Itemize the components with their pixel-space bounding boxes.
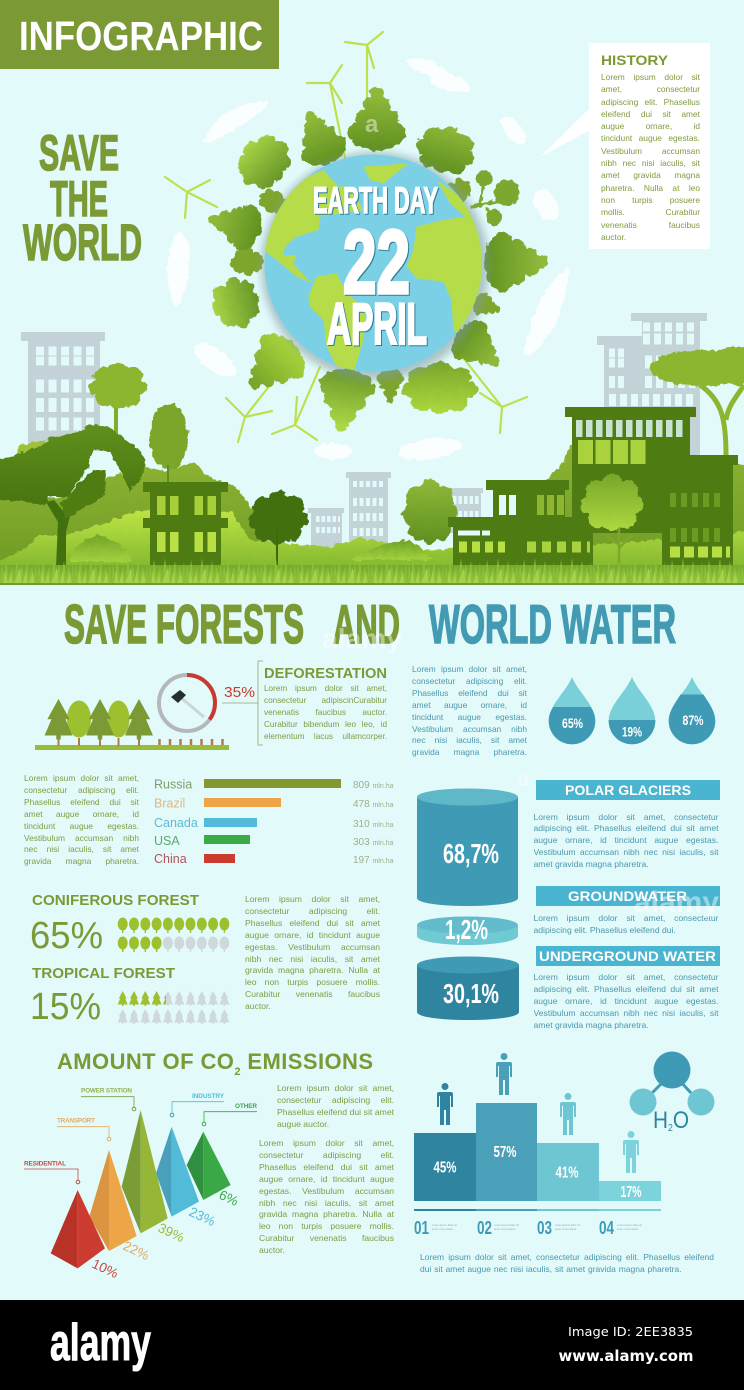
pictogram: coniferous trees <box>118 918 229 952</box>
CO2 text 2: leo non turpis posuere mollis. <box>259 1221 394 1231</box>
globe text: Earth Day 22 April: APRIL <box>327 292 427 357</box>
watermark: alamy <box>634 886 719 919</box>
heading: Deforestation: DEFORESTATION <box>264 666 387 682</box>
polar glaciers text: Lorem ipsum dolor sit amet, consectetur <box>534 812 718 822</box>
history text <box>601 71 700 245</box>
groundwater text: Lorem ipsum dolor sit amet, consectetur <box>534 913 718 923</box>
chart: population step bars <box>414 1053 661 1238</box>
section heading: Save Forests and World Water <box>64 593 676 655</box>
bar 57% <box>476 1103 537 1201</box>
water text: amet augue ornare, id <box>412 700 527 710</box>
bar: USA: 303 mln.ha <box>353 837 394 848</box>
right dark buildings <box>448 407 738 567</box>
polar glaciers text: amet gravida magna pharetra. <box>534 859 649 869</box>
cylinder: 1,2%: 1,2% <box>445 914 488 945</box>
cylinder: 30,1%: 30,1% <box>443 978 499 1009</box>
forest text: tincidunt augue egestas. <box>24 821 139 831</box>
panel: coniferous forest stat <box>32 895 230 952</box>
label: industry <box>170 1093 225 1117</box>
polar glaciers text: Vestibulum accumsan nibh nec nisi iaculis, sit <box>534 847 718 857</box>
bar 45%: 45% <box>434 1160 456 1176</box>
CO2 text 1: Phasellus eleifend dui sit amet <box>277 1107 394 1117</box>
deforestation text: Lorem ipsum dolor sit amet, <box>264 684 387 693</box>
step legend: 04 <box>599 1218 614 1238</box>
step legend: amet, cons ectetur <box>432 1227 453 1231</box>
step legend: 03 <box>537 1218 552 1238</box>
title banner: Infographic <box>0 0 279 69</box>
website: www.alamy.com <box>558 1347 694 1365</box>
dark trees <box>0 425 308 567</box>
underground water text: Vestibulum accumsan nibh nec nisi iaculis, sit <box>534 1008 718 1018</box>
banner: groundwater: GROUNDWATER <box>568 889 687 904</box>
step legend: amet, cons ectetur <box>555 1227 576 1231</box>
step legend: Lorem ipsum dolor sit <box>494 1223 519 1227</box>
history text: tincidunt augue egestas. <box>601 133 700 143</box>
watermark: a <box>365 111 379 138</box>
icon: H2O molecule: H <box>653 1107 670 1134</box>
callout: 35% <box>222 661 263 745</box>
logo: alamy: alamy <box>50 1314 151 1372</box>
bar: China <box>154 852 394 866</box>
percent labels: 10% <box>90 1256 121 1281</box>
step legend: 01 <box>414 1218 429 1238</box>
panel: coniferous forest stat: CONIFEROUS FOREST <box>32 892 199 909</box>
globe text: Earth Day 22 April <box>313 180 438 357</box>
percent labels: 22% <box>121 1238 152 1263</box>
bar: Russia: 809 mln.ha <box>353 780 394 791</box>
watermark: a <box>518 769 530 791</box>
icon: H2O molecule: 2 <box>668 1123 673 1134</box>
deforestation text: elementum lacus ullamcorper. <box>264 732 387 741</box>
forest types text: augue ornare, id tincidunt augue <box>245 930 380 940</box>
gauge with axe <box>159 675 215 731</box>
bar chart: deforestation by country <box>154 778 394 866</box>
globe shadow <box>261 152 489 380</box>
water text: tincidunt augue egestas. <box>412 712 527 722</box>
percent labels: 23% <box>187 1204 218 1229</box>
watermark <box>322 111 719 919</box>
banner: polar glaciers <box>536 780 720 800</box>
polar glaciers text <box>534 812 718 874</box>
history text: augue ornare, id <box>601 121 700 131</box>
axis line <box>414 1209 661 1211</box>
cylinder: 30,1% <box>417 956 519 1020</box>
heading: Save the World <box>23 125 142 271</box>
label: other <box>202 1103 257 1126</box>
CO2 text 2: augue ornare, id tincidunt augue <box>259 1174 394 1184</box>
CO2 text 2 <box>259 1138 394 1260</box>
bar: Canada <box>154 816 394 830</box>
chart: CO2 pyramids <box>24 1088 257 1281</box>
percent labels: 6% <box>217 1187 241 1209</box>
CO2 text 2: auctor. <box>259 1245 285 1255</box>
underground water text <box>534 972 718 1034</box>
bottom water text <box>420 1252 714 1278</box>
step legend: Lorem ipsum dolor sit <box>432 1223 457 1227</box>
CO2 text 1 <box>277 1083 394 1133</box>
globe trees <box>203 87 549 436</box>
label: power station: POWER STATION <box>81 1088 132 1094</box>
water drop: 19%: 19% <box>622 724 642 740</box>
forest text: Phasellus eleifend dui sit <box>24 797 139 807</box>
underground water text: adipiscing elit. Phasellus eleifend dui sit amet <box>534 984 718 994</box>
grass <box>0 558 744 585</box>
forest text: consectetur adipiscing elit. <box>24 785 139 795</box>
CO2 text 2: gravida magna pharetra. Nulla at <box>259 1209 394 1219</box>
heading: Save the World: WORLD <box>23 214 142 271</box>
icon: H2O molecule: O <box>673 1107 689 1134</box>
bar: Russia <box>154 778 394 792</box>
CO2 text 2: consectetur adipiscing elit. <box>259 1150 394 1160</box>
label: industry: INDUSTRY <box>192 1093 225 1100</box>
groundwater text: adipiscing elit. Phasellus eleifend dui. <box>534 925 676 935</box>
step legend: amet, cons ectetur <box>617 1227 638 1231</box>
bar 17%: 17% <box>620 1184 642 1201</box>
water drop: 87%: 87% <box>682 712 704 728</box>
cylinder: 68,7% <box>417 788 518 906</box>
bar 57%: 57% <box>494 1144 516 1161</box>
cylinder: 1,2% <box>417 914 518 945</box>
watermark: alamy <box>322 623 402 654</box>
bottom water text: Lorem ipsum dolor sit amet, consectetur adipiscing elit. Phasellus eleifend <box>420 1252 714 1262</box>
history text: Lorem ipsum dolor sit <box>601 72 700 82</box>
forest types text: auctor. <box>245 1001 271 1011</box>
banner: groundwater <box>536 886 720 906</box>
CO2 text 1: consectetur adipiscing elit. <box>277 1095 394 1105</box>
bar: China: China <box>154 852 187 866</box>
forest text <box>24 773 139 871</box>
water text: Vestibulum accumsan nibh <box>412 724 527 734</box>
history text: mollis. Curabitur <box>601 207 700 217</box>
bushes <box>70 535 434 562</box>
history text: venenatis faucibus <box>601 220 700 230</box>
background trees and hills <box>0 347 744 572</box>
water text: consectetur adipiscing elit. <box>412 676 527 686</box>
forest text: amet augue ornare, id <box>24 809 139 819</box>
tree stumps <box>160 739 222 745</box>
person icons <box>437 1053 639 1173</box>
bar: Russia: Russia <box>154 778 192 792</box>
CO2 text 2: Curabitur venenatis faucibus <box>259 1233 394 1243</box>
history text: adipiscing elit. Phasellus <box>601 97 700 107</box>
panel: tropical forest stat <box>32 968 230 1024</box>
image id: Image ID: 2EE3835 <box>568 1324 693 1339</box>
water text: gravida magna pharetra. <box>412 747 527 757</box>
banner: underground water <box>536 946 720 966</box>
heading: CO2 emissions: EMISSIONS <box>241 1049 373 1074</box>
wind turbines <box>165 32 527 442</box>
step legend: 02 <box>477 1218 492 1238</box>
label: other: OTHER <box>235 1103 257 1110</box>
label: transport: TRANSPORT <box>57 1118 95 1124</box>
CO2 text 2: Phasellus eleifend dui sit amet <box>259 1162 394 1172</box>
underground water text: Lorem ipsum dolor sit amet, consectetur <box>534 972 718 982</box>
CO2 text 1: Lorem ipsum dolor sit amet, <box>277 1083 394 1093</box>
history text: amet, consectetur <box>601 84 700 94</box>
forest types text: Lorem ipsum dolor sit amet, <box>245 894 380 904</box>
label: residential <box>24 1160 80 1184</box>
bar: Canada: 310 mln.ha <box>353 819 394 830</box>
water drop: 65%: 65% <box>562 715 583 731</box>
forest types text: leo non turpis posuere mollis. <box>245 977 380 987</box>
percent labels: 39% <box>156 1220 187 1245</box>
forest text: Lorem ipsum dolor sit amet, <box>24 773 139 783</box>
history text: Vestibulum accumsan <box>601 146 700 156</box>
icon: H2O molecule <box>630 1052 714 1134</box>
dark building windows <box>458 428 730 552</box>
bar: USA: USA <box>154 834 180 848</box>
groundwater text <box>534 913 718 939</box>
label: power station <box>81 1088 136 1111</box>
bar: Canada: Canada <box>154 816 198 830</box>
bar: Brazil <box>154 796 394 810</box>
gray buildings <box>21 313 707 548</box>
forest text: gravida magna pharetra. <box>24 856 139 866</box>
CO2 text 1: augue auctor. <box>277 1119 329 1129</box>
CO2 text 2: egestas. Vestibulum accumsan <box>259 1186 394 1196</box>
section heading: Save Forests and World Water: SAVE FORESTS <box>64 593 304 655</box>
step legend: amet, cons ectetur <box>494 1227 515 1231</box>
forest types text: gravida magna pharetra. Nulla at <box>245 965 380 975</box>
panel: coniferous forest stat: 65% <box>30 915 103 957</box>
bar 45% <box>414 1133 476 1201</box>
heading: Save the World: THE <box>50 171 108 227</box>
deforestation illustration <box>35 699 229 750</box>
clouds <box>168 54 569 463</box>
underground water text: augue ornare, id tincidunt augue egestas. <box>534 996 718 1006</box>
foreground hill <box>0 510 744 572</box>
forest types text: Curabitur venenatis faucibus <box>245 989 380 999</box>
banner: underground water: UNDERGROUND WATER <box>539 949 716 964</box>
history text: amet gravida magna <box>601 170 700 180</box>
footer bar <box>0 1300 744 1390</box>
polar glaciers text: augue ornare, id tincidunt augue egestas. <box>534 835 718 845</box>
water drop: 65% <box>549 677 595 744</box>
panel: tropical forest stat: 15% <box>30 986 101 1028</box>
bottom water text: dui sit amet augue nec nisi iaculis, sit amet gravida magna pharetra. <box>420 1264 682 1274</box>
step legend <box>414 1218 642 1238</box>
history text: non turpis posuere <box>601 195 700 205</box>
globe text: Earth Day 22 April: EARTH DAY <box>313 180 438 221</box>
bar: USA <box>154 834 394 848</box>
forest text: Vestibulum accumsan nibh <box>24 833 139 843</box>
forest types text: Phasellus eleifend dui sit amet <box>245 918 380 928</box>
deforestation text: consectetur adipiscinCurabitur <box>264 696 387 705</box>
heading: CO2 emissions: 2 <box>234 1066 240 1078</box>
bar 41%: 41% <box>556 1164 578 1182</box>
section heading: Save Forests and World Water: AND <box>333 593 400 655</box>
bar 17% <box>599 1181 661 1201</box>
bar: Brazil: Brazil <box>154 796 185 810</box>
globe text: Earth Day 22 April: 22 <box>343 213 410 313</box>
underground water text: amet gravida magna pharetra. <box>534 1020 649 1030</box>
history text: nibh nec nisi iaculis, sit <box>601 158 700 168</box>
left dark building <box>143 482 228 567</box>
label: residential: RESIDENTIAL <box>24 1160 66 1168</box>
step legend: Lorem ipsum dolor sit <box>555 1223 580 1227</box>
water text: Phasellus eleifend dui sit <box>412 688 527 698</box>
gray building windows <box>36 327 696 532</box>
water text: Lorem ipsum dolor sit amet, <box>412 664 527 674</box>
bar: China: 197 mln.ha <box>353 855 394 866</box>
bar: Brazil: 478 mln.ha <box>353 799 394 810</box>
forest types text: nibh nec nisi iaculis, sit amet <box>245 954 380 964</box>
globe <box>263 155 487 373</box>
history text: pharetra. Nulla at leo <box>601 183 700 193</box>
panel: hero scene <box>0 32 744 585</box>
forest text: nec nisi iaculis, sit amet <box>24 844 139 854</box>
callout: 35%: 35% <box>224 685 255 701</box>
panel: history callout: HISTORY <box>601 53 668 68</box>
forest types text: egestas. Vestibulum accumsan <box>245 942 380 952</box>
forest types text <box>245 894 380 1016</box>
deforestation text: venenatis faucibus auctor. <box>264 708 387 717</box>
label: transport <box>57 1118 111 1141</box>
panel: tropical forest stat: TROPICAL FOREST <box>32 965 175 982</box>
step legend: Lorem ipsum dolor sit <box>617 1223 642 1227</box>
history text: auctor. <box>601 232 626 242</box>
water text <box>412 664 527 762</box>
deforestation text: Curabitur bibendum leo leo, id <box>264 720 387 729</box>
heading: CO2 emissions: AMOUNT OF CO <box>57 1049 234 1074</box>
light foreground tree <box>580 474 644 565</box>
CO2 text 2: nibh nec nisi iaculis, sit amet <box>259 1198 394 1208</box>
cylinder: 68,7%: 68,7% <box>443 838 499 869</box>
water text: nec nisi iaculis, sit amet <box>412 735 527 745</box>
deforestation text <box>264 683 387 745</box>
CO2 text 2: Lorem ipsum dolor sit amet, <box>259 1138 394 1148</box>
heading: Save the World: SAVE <box>39 125 119 181</box>
water drop: 19% <box>609 677 655 744</box>
forest types text: consectetur adipiscing elit. <box>245 906 380 916</box>
polar glaciers text: adipiscing elit. Phasellus eleifend dui sit amet <box>534 823 718 833</box>
panel: history callout <box>540 43 710 249</box>
pictogram: tropical trees <box>118 991 229 1024</box>
water drop: 87% <box>669 677 715 744</box>
percent labels <box>90 1187 241 1281</box>
title banner: Infographic: INFOGRAPHIC <box>19 13 263 59</box>
banner: polar glaciers: POLAR GLACIERS <box>565 783 691 798</box>
bar 41% <box>537 1143 599 1201</box>
history text: eleifend dui sit amet <box>601 109 700 119</box>
